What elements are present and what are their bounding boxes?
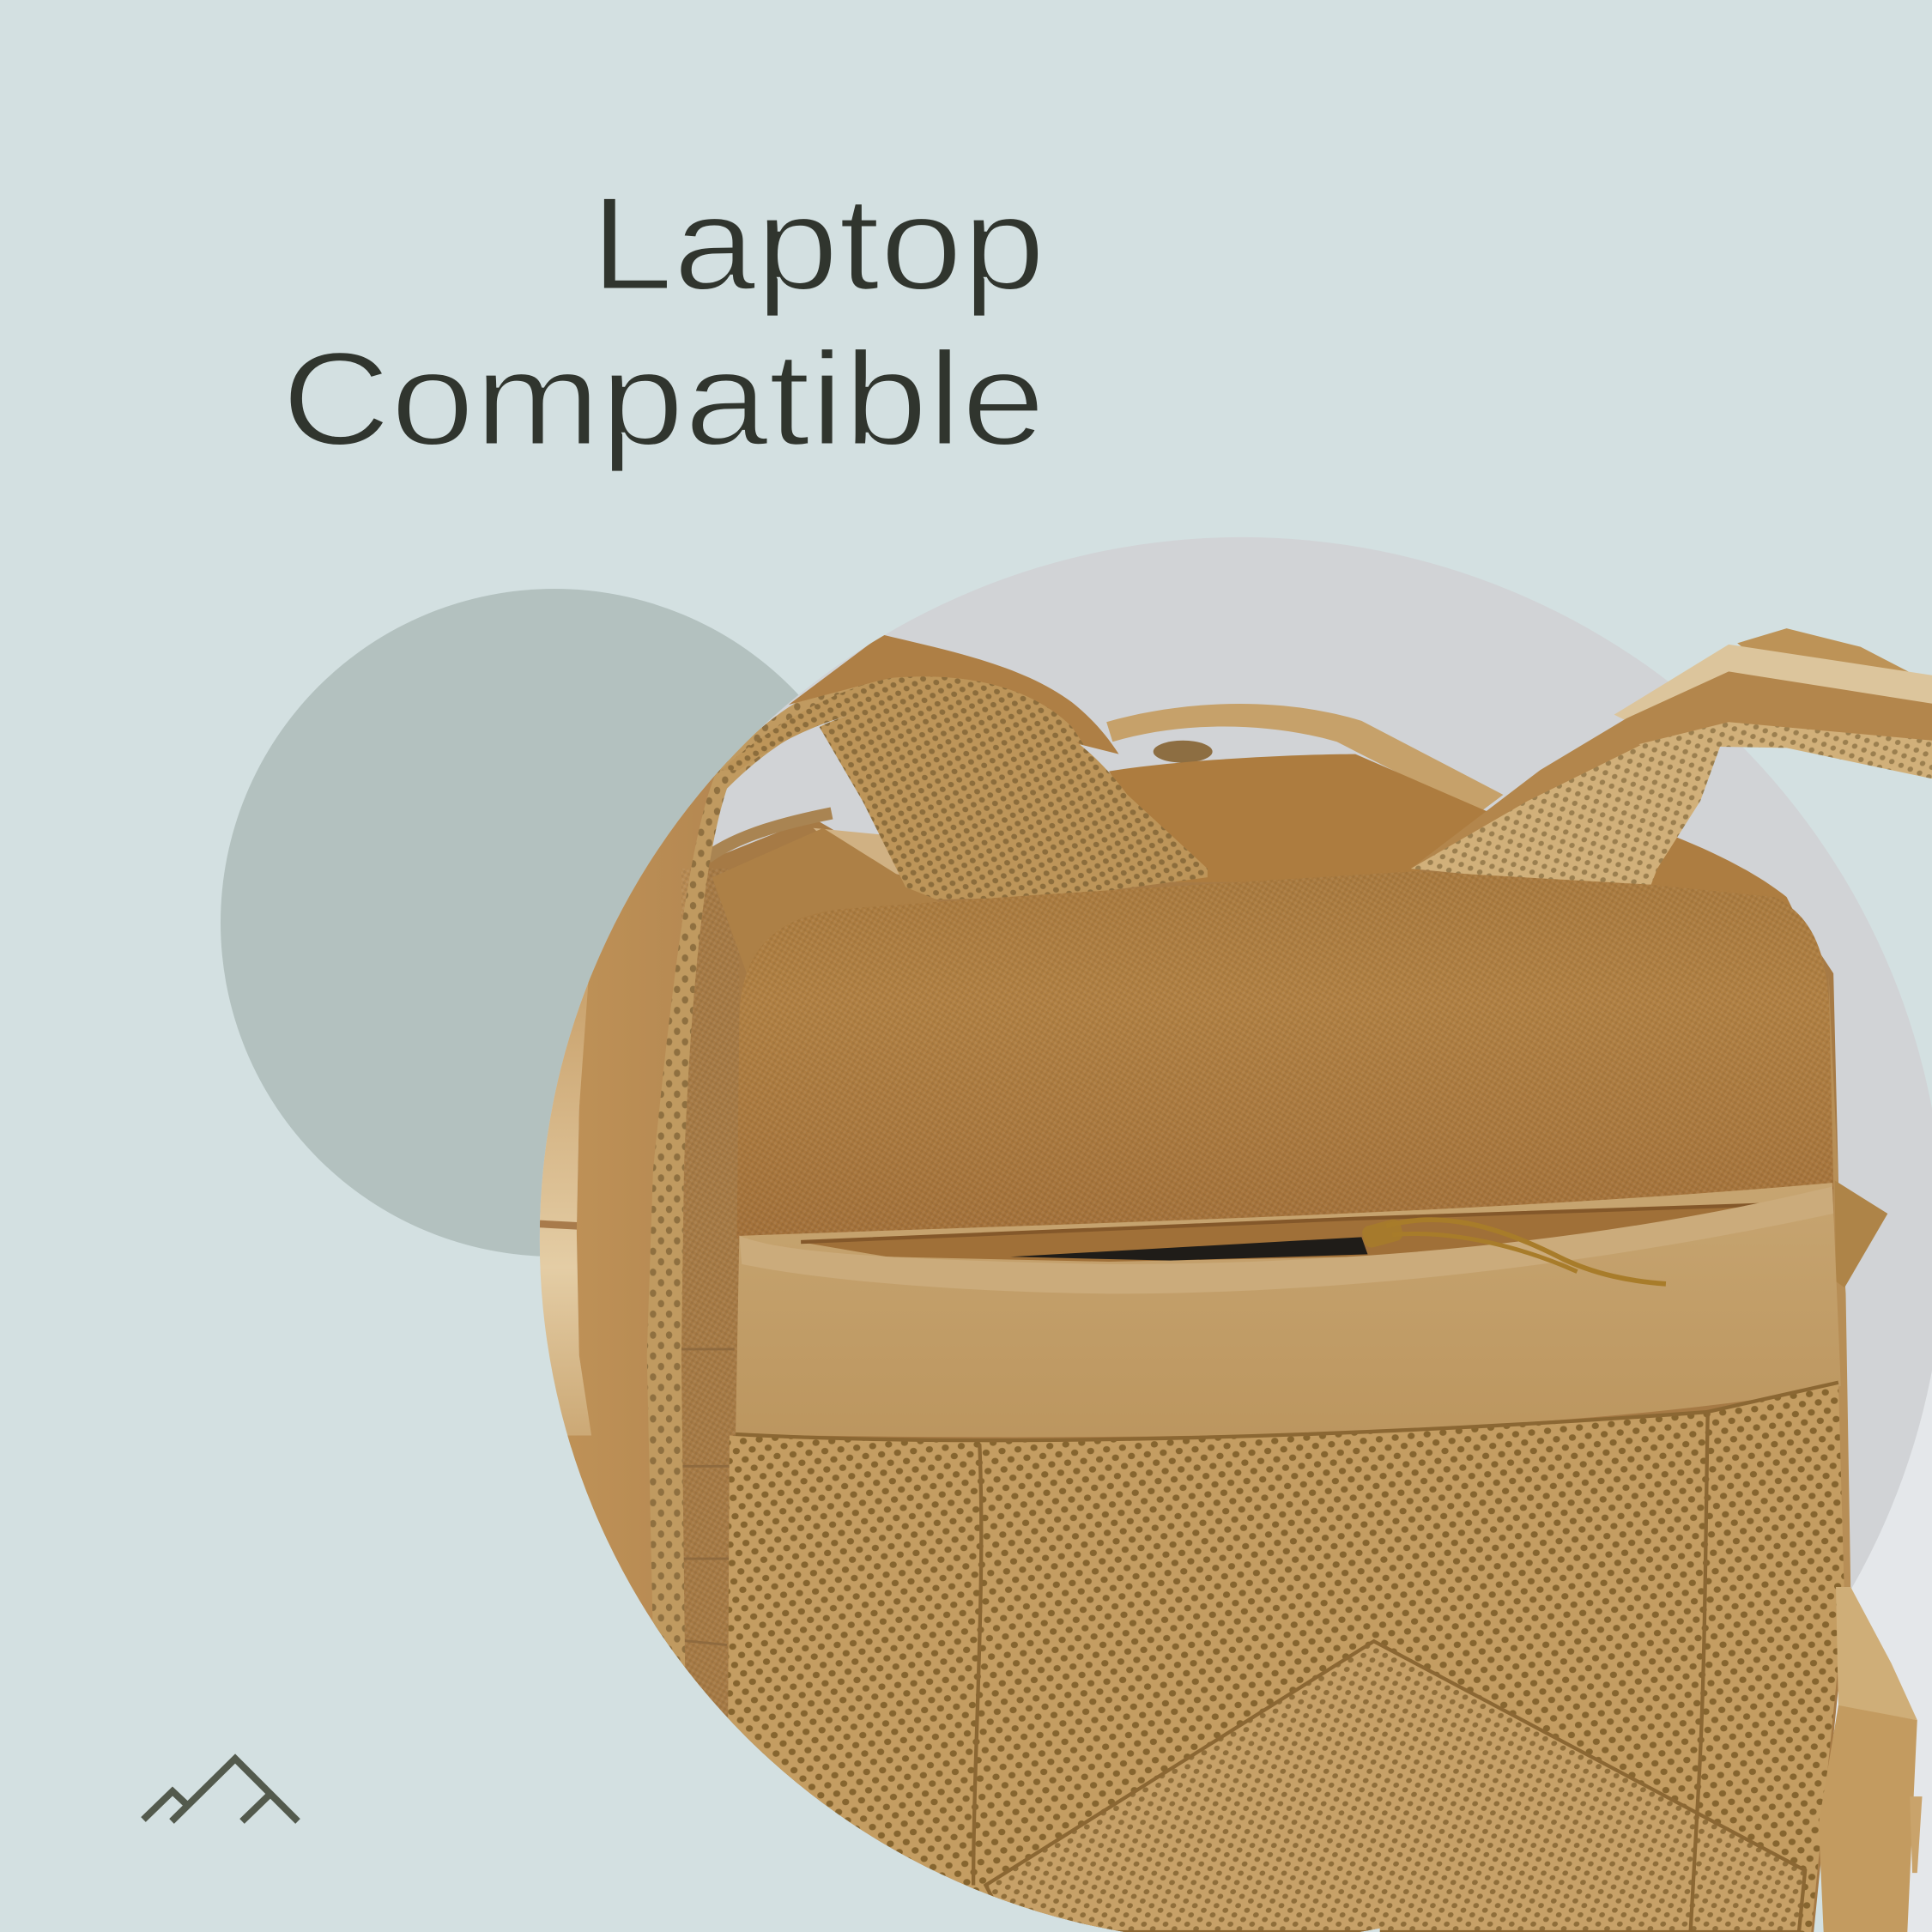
- top surface: [1109, 754, 1497, 882]
- mesh seams: [736, 1383, 1838, 1440]
- zip puller: [1154, 741, 1213, 763]
- light haze lower right: [1828, 1322, 1932, 1932]
- main compartment: [736, 871, 1833, 1239]
- side tab: [1835, 1180, 1887, 1287]
- backpack photo: [493, 537, 1932, 1932]
- backpack illustration: [493, 628, 1932, 1932]
- title: [282, 169, 1045, 473]
- mountain logo: [143, 1759, 298, 1821]
- pocket band: [736, 1183, 1841, 1437]
- lower right strap: [1819, 1587, 1923, 1932]
- pocket binding: [739, 1186, 1833, 1293]
- zip rope: [707, 813, 832, 857]
- left webbing strap: [540, 975, 591, 1448]
- lower chevron seam: [1691, 1799, 1698, 1932]
- lower mesh back panel: [727, 1383, 1844, 1932]
- left side fabric: [567, 761, 728, 1681]
- title line 1: Laptop: [591, 169, 1045, 318]
- title line 2: Compatible: [282, 324, 1045, 473]
- side panel ribs: [681, 1348, 735, 1646]
- dark sage circle: [221, 589, 888, 1257]
- right shoulder strap: [1411, 628, 1932, 885]
- top left fabric: [712, 829, 896, 951]
- tab on top: [814, 827, 899, 875]
- left shoulder strap: [721, 634, 1208, 899]
- right body edge: [1828, 973, 1850, 1602]
- chevron lower mesh: [985, 1641, 1805, 1932]
- top right surface: [1656, 838, 1792, 909]
- zipper pull cord: [1360, 1218, 1666, 1284]
- grey photo disc: [540, 537, 1932, 1932]
- body silhouette: [653, 818, 1848, 1932]
- handle: [1106, 704, 1503, 813]
- left mesh strap: [647, 665, 899, 1669]
- zipper opening: [801, 1202, 1826, 1262]
